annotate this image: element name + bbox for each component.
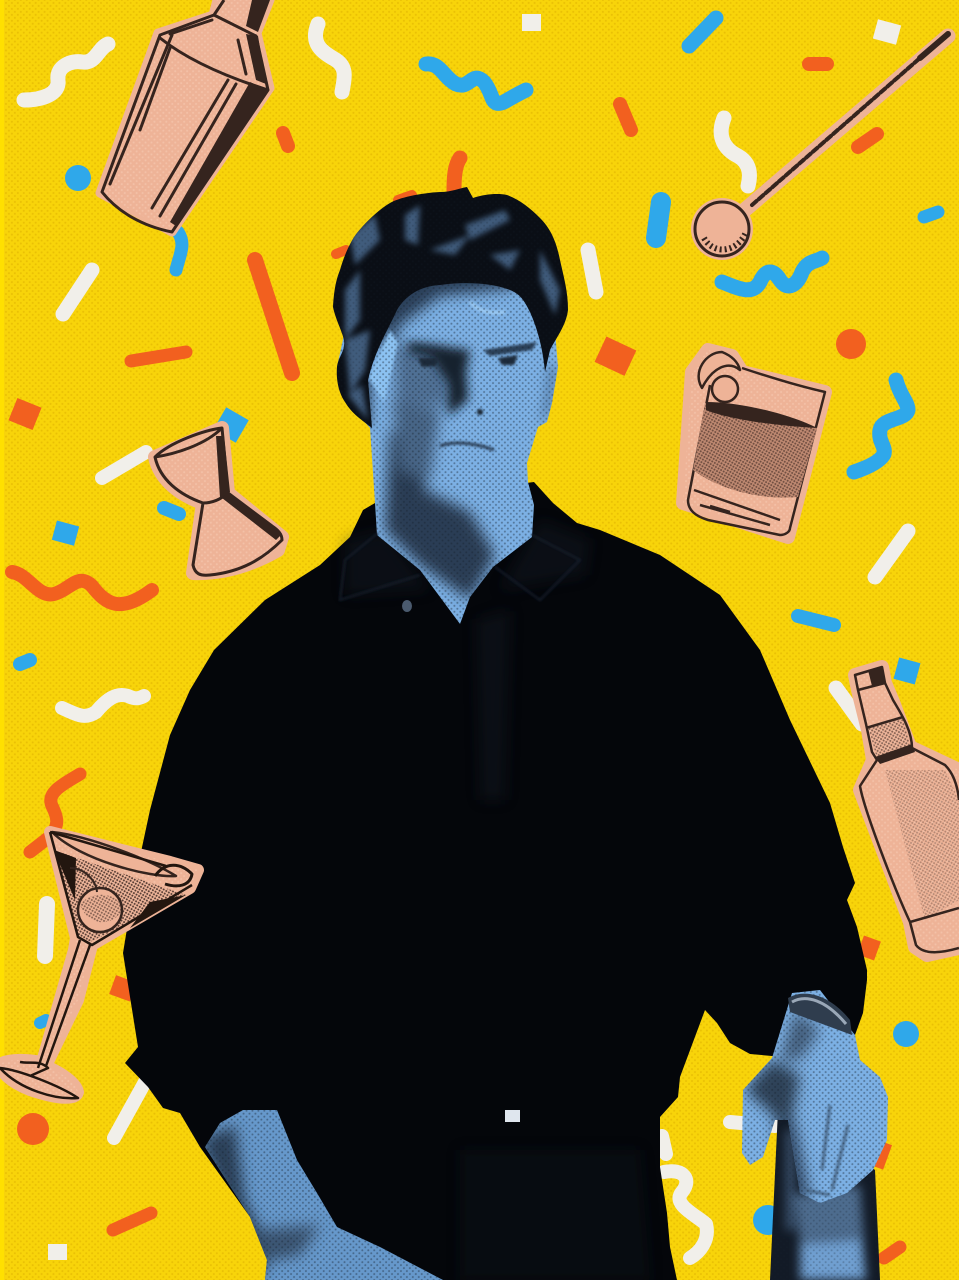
icon: whisky bottle: [855, 667, 959, 955]
confetti: orange shapes: [8, 329, 892, 1170]
man: hair: [333, 187, 568, 428]
icon: bar spoon: [691, 34, 948, 260]
man: collar: [340, 533, 580, 600]
man: right hand: [742, 990, 888, 1203]
man: shirt folds: [345, 520, 650, 1280]
icon: bottle in hand: [770, 1120, 880, 1280]
icon: martini glass: [0, 832, 198, 1098]
man: shirt and trousers: [123, 482, 867, 1280]
man: watch: [788, 994, 852, 1035]
man: collar button: [402, 600, 412, 612]
man: left forearm: [205, 1110, 443, 1280]
man: shirt button: [505, 1110, 520, 1122]
icon: cocktail shaker: [100, 0, 270, 232]
man: head and neck skin: [337, 283, 558, 624]
icon: jigger: [155, 428, 282, 575]
man: figure: [123, 180, 895, 1280]
confetti: blue: [20, 18, 938, 1023]
icon: rocks glass: [683, 350, 825, 537]
confetti: blue shapes: [52, 165, 920, 1235]
